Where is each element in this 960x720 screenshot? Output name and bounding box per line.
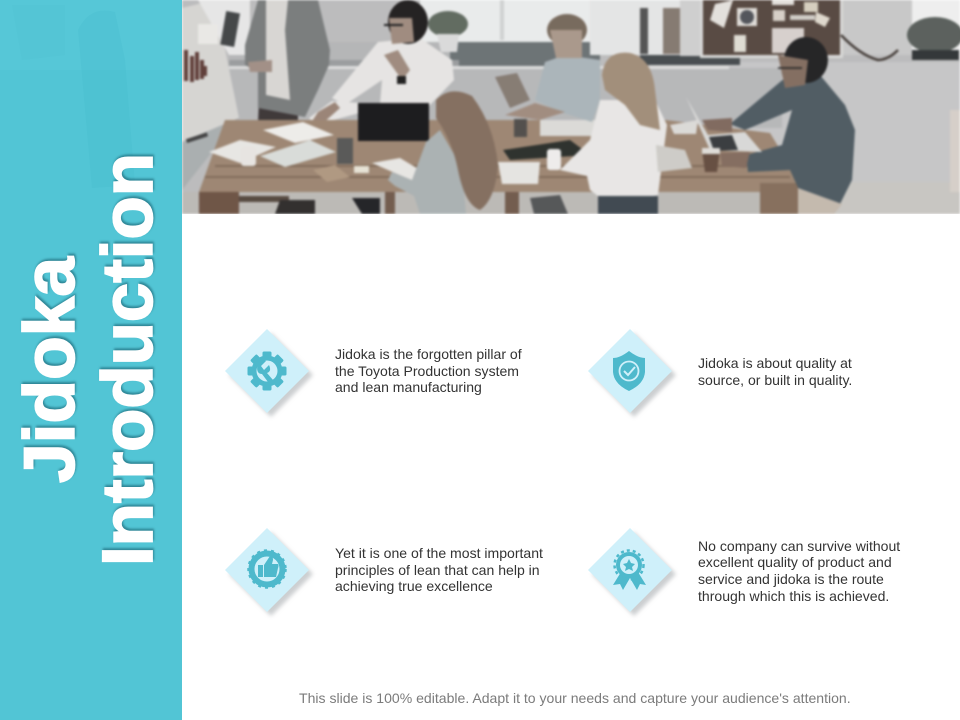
corkboard xyxy=(700,0,843,58)
text: forgotten pillar: the Toyota Production system xyxy=(335,363,519,379)
woman with long hair, back view xyxy=(388,130,466,214)
flipchart xyxy=(182,0,239,142)
seated man with laptop and denim shirt xyxy=(730,72,855,204)
woman with tablet xyxy=(535,55,600,122)
icon: badge with thumbs up xyxy=(225,528,314,616)
photo: team meeting around a wooden table xyxy=(182,0,960,214)
text: forgotten pillar: and lean manufacturing xyxy=(335,379,482,395)
open laptop and coffee cup xyxy=(686,97,762,152)
text: important principles xyxy=(335,545,543,594)
text: survive without quality: through which this is achieved. xyxy=(698,588,889,604)
title: Jidoka Introduction: Jidoka xyxy=(11,256,90,483)
text: quality at source: Jidoka is about quality at xyxy=(698,355,852,371)
title: Jidoka Introduction xyxy=(11,153,168,566)
footer note: This slide is 100% editable. Adapt it to your needs and capture your audience's attention. xyxy=(299,690,851,706)
text: quality at source: source, or built in quality. xyxy=(698,372,852,388)
man with glasses in white shirt xyxy=(332,38,454,118)
text: forgotten pillar xyxy=(335,346,522,395)
text: survive without quality xyxy=(698,538,900,604)
panel: teal sidebar with title xyxy=(0,0,182,720)
text: quality at source xyxy=(698,355,852,388)
icon: ribbon award with star xyxy=(588,528,676,616)
text: survive without quality: No company can survive without xyxy=(698,538,900,554)
text: survive without quality: excellent quality of product and xyxy=(698,554,892,570)
icon: shield with check xyxy=(588,329,676,418)
icon: gear with wrench xyxy=(225,329,314,418)
wooden table xyxy=(199,120,800,192)
title: Jidoka Introduction: Introduction xyxy=(89,153,168,566)
standing man in grey jacket xyxy=(258,100,298,122)
plant right and plant on sill xyxy=(907,17,960,53)
text: important principles: Yet it is one of the most important xyxy=(335,545,543,561)
papers and mugs on table xyxy=(263,122,334,143)
text: forgotten pillar: Jidoka is the forgotten pillar of xyxy=(335,346,522,362)
text: survive without quality: service and jidoka is the route xyxy=(698,571,884,587)
text: important principles: principles of lean that can help in xyxy=(335,562,540,578)
blonde woman in white sweater xyxy=(560,100,667,205)
laptop black xyxy=(358,103,429,141)
window and sill xyxy=(420,0,610,42)
text: important principles: achieving true excellence xyxy=(335,578,493,594)
